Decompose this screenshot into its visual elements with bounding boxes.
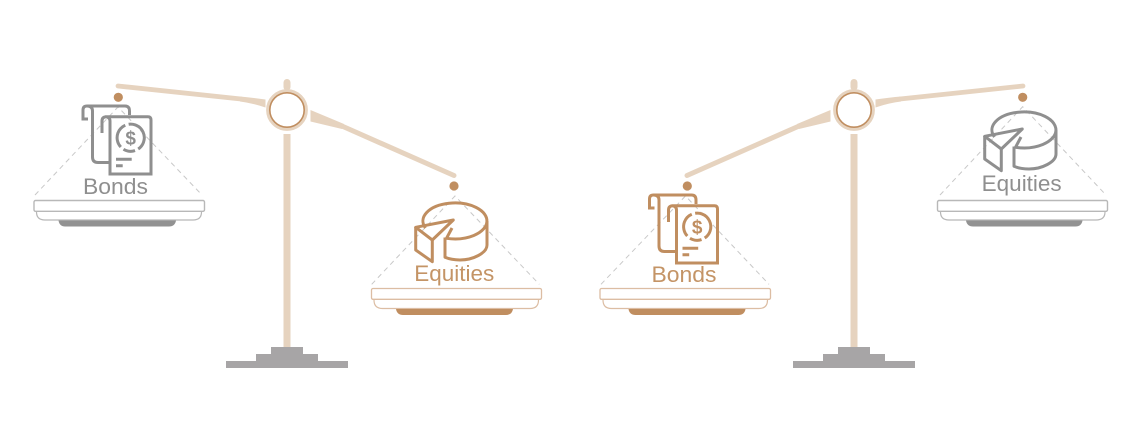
Equities icon	[985, 112, 1056, 171]
Bonds label: Bonds	[83, 174, 148, 199]
right scale base	[793, 347, 915, 368]
left scale post top	[284, 82, 290, 87]
dashed strings: Bonds	[35, 107, 202, 195]
left scale post	[284, 134, 290, 347]
left scale hub	[268, 91, 306, 129]
left scale base	[226, 347, 348, 368]
Bonds label: Bonds	[652, 262, 716, 287]
dashed strings: Bonds	[601, 196, 769, 284]
Bonds icon	[83, 106, 151, 174]
dashed strings: Equities	[940, 107, 1106, 195]
Bonds pan	[600, 288, 770, 315]
right scale post top	[850, 82, 858, 87]
right scale hub	[835, 91, 873, 129]
Equities label: Equities	[982, 171, 1062, 196]
hanging dot: Bonds	[114, 93, 123, 102]
left scale	[34, 82, 542, 368]
dashed strings: Equities	[372, 196, 539, 284]
Bonds dollar sign: $	[692, 218, 703, 238]
right scale	[600, 82, 1108, 368]
hanging dot: Bonds	[683, 181, 692, 191]
Equities pan	[372, 288, 542, 315]
right scale beam	[687, 86, 1023, 176]
Bonds dollar sign: $	[125, 128, 136, 150]
left scale beam	[118, 86, 454, 176]
Bonds icon	[650, 195, 718, 263]
Equities pan	[938, 200, 1108, 226]
right scale post	[850, 134, 858, 347]
Bonds pan	[34, 200, 204, 226]
hanging dot: Equities	[1018, 93, 1027, 102]
hanging dot: Equities	[449, 181, 459, 191]
Equities icon	[416, 203, 487, 262]
Equities label: Equities	[414, 261, 494, 286]
